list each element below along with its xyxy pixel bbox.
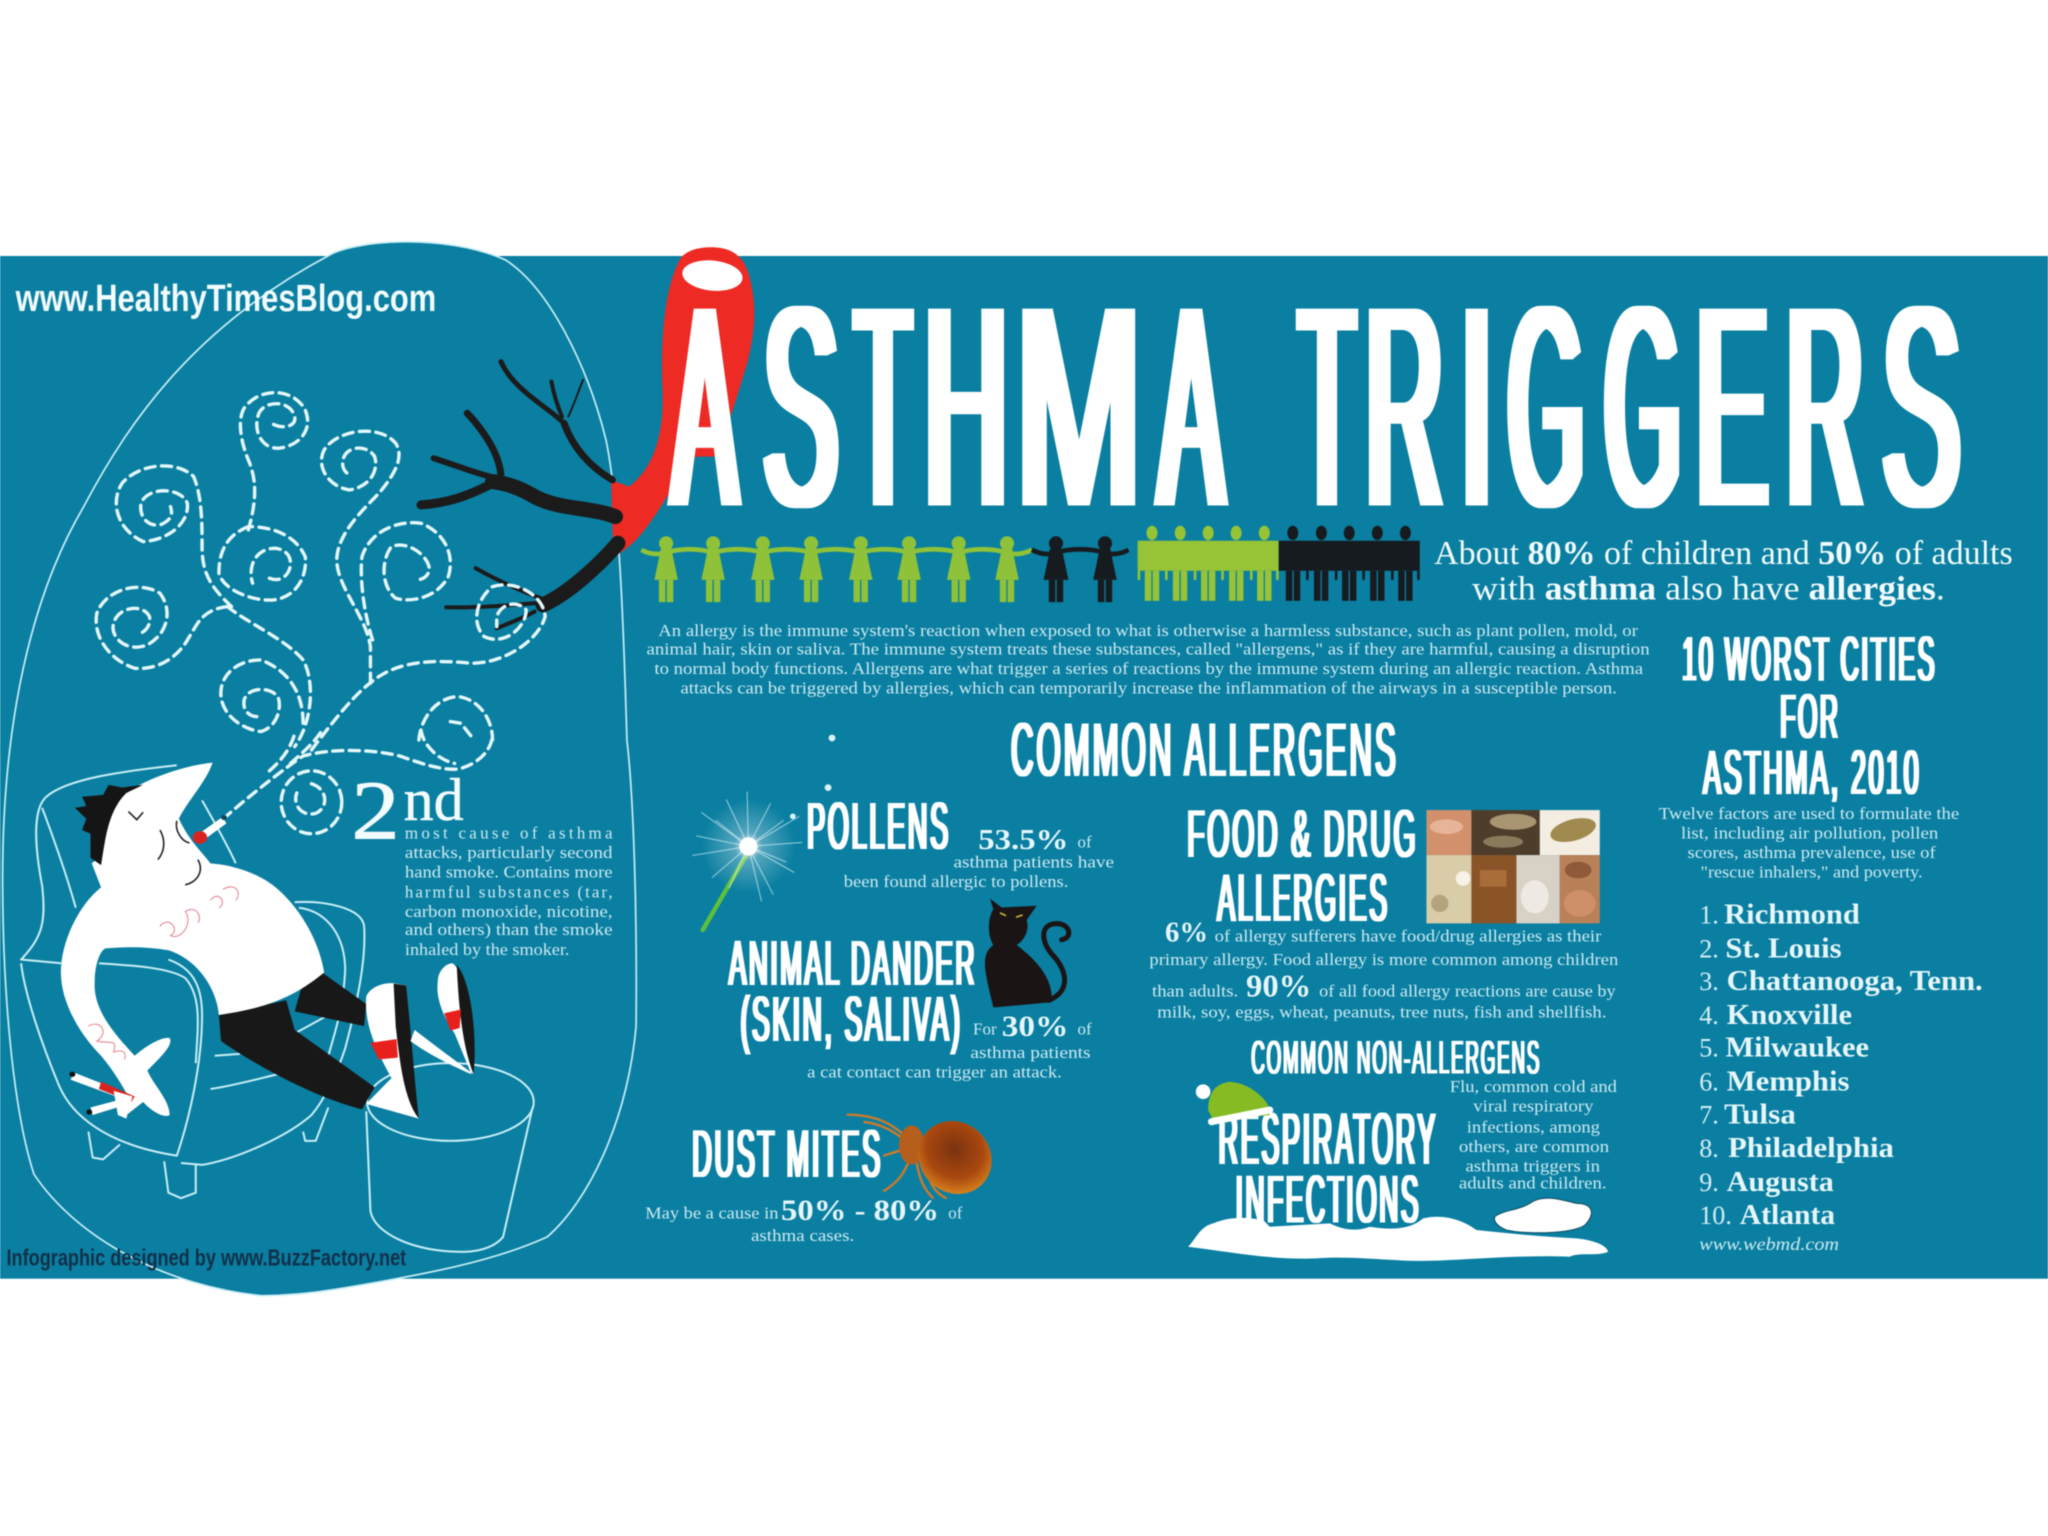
city list: Memphis <box>1727 1066 1849 1098</box>
city list: Richmond <box>1724 898 1860 930</box>
snow drift <box>1188 1198 1608 1261</box>
city list: Augusta <box>1727 1166 1834 1198</box>
title: G <box>1605 246 1680 566</box>
allergen: dust mites: asthma cases. <box>751 1226 854 1245</box>
allergen: food and drug allergies: of all food allergy reactions are cause by <box>1319 982 1616 1001</box>
city list: Milwaukee <box>1725 1032 1869 1064</box>
allergen: pollens: 53.5% <box>978 824 1068 856</box>
2nd statistic: harmful substances (tar, <box>405 882 613 901</box>
text: RESPIRATORY <box>1219 1099 1438 1180</box>
title: T <box>856 246 910 566</box>
allergen: food and drug allergies: of allergy sufferers have food/drug allergies as their <box>1215 927 1602 946</box>
armchair <box>21 765 364 1198</box>
face lines <box>128 812 200 885</box>
non-allergen description: Flu, common cold and <box>1450 1077 1618 1096</box>
title <box>673 246 1960 566</box>
city list: 3. <box>1699 967 1719 996</box>
city list: 8. <box>1699 1134 1719 1163</box>
allergen: animal dander <box>729 927 1092 1082</box>
text: COMMON ALLERGENS <box>1011 708 1399 793</box>
allergy statistic: with asthma also have allergies . <box>1472 571 1945 608</box>
text: INFECTIONS <box>1236 1163 1421 1238</box>
2nd statistic: carbon monoxide, nicotine, <box>405 902 613 921</box>
allergy statistic: About 80% of children and 50% of adults <box>1434 535 2013 572</box>
allergen: animal dander: a cat contact can trigger an attack. <box>807 1063 1062 1082</box>
allergen: food and drug allergies: 90% <box>1246 969 1311 1004</box>
city list: Atlanta <box>1740 1199 1835 1231</box>
title: T <box>1300 246 1354 566</box>
2nd statistic: 2 <box>351 766 400 858</box>
2nd statistic: hand smoke. Contains more <box>405 863 613 882</box>
left sock <box>366 983 419 1119</box>
allergen: pollens: of <box>1078 833 1092 852</box>
title: A <box>1159 246 1223 566</box>
city list <box>1699 898 1983 1231</box>
allergen: dust mites: DUST MITES <box>692 1117 883 1192</box>
panel: worst cities <box>1659 624 1983 1254</box>
allergen: pollens: asthma patients have <box>953 852 1114 871</box>
city list: Knoxville <box>1727 999 1852 1031</box>
pictogram: children with allergies <box>641 536 1128 602</box>
title: I <box>1461 246 1492 566</box>
icon: santa hat <box>1196 1082 1270 1122</box>
hand cigarettes <box>69 1072 141 1119</box>
smoke swirls <box>96 393 545 750</box>
tattoos <box>88 887 238 1059</box>
allergen: dust mites: May be a cause in <box>645 1204 779 1223</box>
city list: Philadelphia <box>1728 1132 1894 1164</box>
allergen: food and drug allergies: FOOD & DRUG <box>1187 797 1418 872</box>
city list: 10. <box>1699 1201 1732 1230</box>
2nd statistic: attacks, particularly second <box>405 843 613 862</box>
allergen: animal dander: 30% <box>1002 1010 1068 1043</box>
heading: worst cities: FOR <box>1780 682 1840 752</box>
website url: www.HealthyTimesBlog.com <box>15 278 436 320</box>
title: A <box>673 246 737 566</box>
cities note <box>1659 804 1959 882</box>
title: R <box>1366 246 1442 566</box>
source: www.webmd.com <box>1699 1234 1839 1254</box>
non-allergen description: asthma triggers in <box>1465 1157 1601 1176</box>
designer credit: Infographic designed by www.BuzzFactory.net <box>7 1245 406 1271</box>
ottoman <box>366 1063 534 1252</box>
mouth cigarette <box>193 815 227 844</box>
title: G <box>1508 246 1584 566</box>
bronchial tree <box>421 362 618 628</box>
allergy explanation paragraph: animal hair, skin or saliva. The immune system treats these substances, called "allergens," as if they are harmful, causing a disruption <box>647 639 1650 658</box>
2nd statistic: inhaled by the smoker. <box>405 940 569 959</box>
food photo collage <box>1426 810 1600 923</box>
title: E <box>1697 246 1768 566</box>
allergen: animal dander: (SKIN, SALIVA) <box>741 983 963 1055</box>
2nd statistic: nd <box>404 766 464 833</box>
title: S <box>764 246 838 566</box>
non-allergen description: others, are common <box>1459 1137 1610 1156</box>
allergen: pollens: been found allergic to pollens. <box>844 872 1068 891</box>
2nd statistic: most cause of asthma <box>405 824 613 843</box>
2nd statistic: and others) than the smoke <box>405 920 613 939</box>
allergen: food and drug allergies: 6% <box>1165 917 1208 949</box>
trousers <box>219 972 375 1109</box>
allergy explanation paragraph <box>647 621 1650 698</box>
city list: 4. <box>1699 1001 1719 1030</box>
allergen: food and drug allergies <box>1149 797 1619 1021</box>
city list: Tulsa <box>1724 1098 1796 1130</box>
heading: worst cities <box>1682 624 1937 808</box>
city list: 7. <box>1699 1100 1719 1129</box>
allergen: food and drug allergies: ALLERGIES <box>1217 861 1390 936</box>
title: M <box>1016 246 1142 566</box>
lower smoke trail <box>223 730 493 834</box>
heading: respiratory infections <box>1219 1099 1438 1238</box>
icon: black cat <box>985 899 1069 1008</box>
lung outline <box>3 242 636 1296</box>
city list: Chattanooga, Tenn. <box>1727 965 1983 997</box>
non-allergen description: viral respiratory <box>1473 1097 1594 1116</box>
red windpipe <box>611 247 754 557</box>
allergen: animal dander: For <box>973 1019 997 1038</box>
allergen: pollens: POLLENS <box>807 790 951 864</box>
allergen: animal dander: asthma patients <box>970 1043 1091 1062</box>
allergen: pollens <box>807 790 1114 891</box>
non-allergen description: infections, among <box>1467 1117 1601 1136</box>
allergy statistic <box>1434 535 2013 608</box>
cities note: scores, asthma prevalence, use of <box>1688 843 1936 862</box>
city list: 2. <box>1699 934 1719 963</box>
allergen: food and drug allergies: primary allergy. Food allergy is more common among children <box>1149 950 1619 969</box>
2nd statistic <box>351 766 613 959</box>
allergy explanation paragraph: attacks can be triggered by allergies, which can temporarily increase the inflammation of the airways in a susceptible person. <box>680 679 1617 698</box>
allergen: dust mites: 50% - 80% <box>781 1194 939 1227</box>
city list: St. Louis <box>1725 932 1842 964</box>
cities note: list, including air pollution, pollen <box>1681 824 1939 843</box>
smoking man <box>61 763 475 1119</box>
icon: dust mite <box>847 1108 1003 1207</box>
allergy explanation paragraph: An allergy is the immune system's reaction when exposed to what is otherwise a harmless substance, such as plant pollen, mold, or <box>658 621 1638 640</box>
teal background panel <box>0 256 2048 1279</box>
right sock <box>410 963 475 1074</box>
city list: 1. <box>1699 900 1719 929</box>
allergen: animal dander: ANIMAL DANDER <box>729 927 977 999</box>
non-allergen description: adults and children. <box>1459 1174 1607 1193</box>
city list: 5. <box>1699 1034 1719 1063</box>
text: COMMON NON-ALLERGENS <box>1251 1031 1541 1084</box>
icon: sparkler <box>692 792 802 930</box>
hair <box>75 785 143 865</box>
allergen: food and drug allergies: milk, soy, eggs, wheat, peanuts, tree nuts, fish and shellfish. <box>1157 1002 1607 1021</box>
body <box>61 763 324 1117</box>
pictogram: adults with allergies <box>1138 526 1420 601</box>
allergen: food and drug allergies: than adults. <box>1152 982 1238 1001</box>
sparkles <box>790 735 835 819</box>
cities note: Twelve factors are used to formulate the <box>1659 804 1959 823</box>
title: R <box>1787 246 1863 566</box>
title: H <box>925 246 1007 566</box>
cities note: "rescue inhalers," and poverty. <box>1701 863 1923 882</box>
city list: 6. <box>1699 1068 1719 1097</box>
city list: 9. <box>1699 1168 1719 1197</box>
allergen: animal dander: of <box>1078 1019 1092 1038</box>
allergen: dust mites: of <box>948 1204 963 1223</box>
allergen: dust mites <box>645 1117 963 1245</box>
allergy explanation paragraph: to normal body functions. Allergens are what trigger a series of reactions by the immune system during an allergic reaction. Asthma <box>654 659 1644 678</box>
non-allergen description <box>1450 1077 1618 1193</box>
